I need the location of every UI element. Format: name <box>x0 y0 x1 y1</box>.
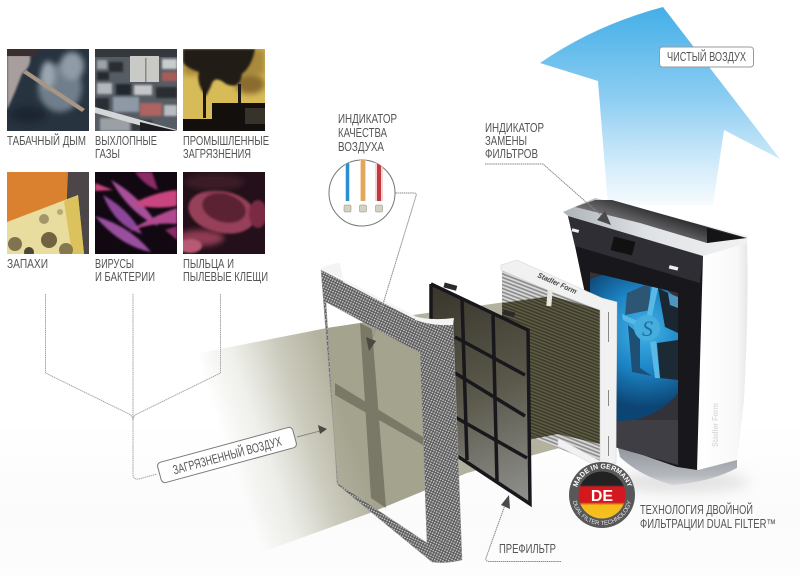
label: exhaust gases: ВЫХЛОПНЫЕ <box>95 134 157 148</box>
prefilter <box>425 283 530 505</box>
filter louvers <box>502 268 600 465</box>
label: industrial pollution: ПРОМЫШЛЕННЫЕ <box>183 134 269 148</box>
front perforated panel <box>320 263 462 563</box>
filter pleats <box>502 296 600 445</box>
heading: filter replacement indicator: ЗАМЕНЫ <box>485 134 527 148</box>
unit body <box>568 216 703 470</box>
brand text on frame: Stadler Form <box>536 271 578 296</box>
window tint over beam <box>328 322 425 510</box>
photo: odours <box>7 172 89 257</box>
panel white lip <box>320 263 343 279</box>
main filter <box>501 260 617 468</box>
unit top cap <box>563 198 748 256</box>
unit white side <box>698 241 748 470</box>
arrow: prefilter <box>486 495 561 562</box>
fan window <box>590 272 678 465</box>
label: tobacco smoke: ТАБАЧНЫЙ ДЫМ <box>7 133 86 148</box>
label: viruses and bacteria: И БАКТЕРИИ <box>95 270 155 284</box>
label: prefilter: ПРЕФИЛЬТР <box>499 542 556 556</box>
heading: air quality indicator: ВОЗДУХА <box>338 140 385 154</box>
connector lines from pollutants <box>46 294 220 479</box>
vertical logo: Stadler Form <box>711 403 720 447</box>
label: industrial pollution: ЗАГРЯЗНЕНИЯ <box>183 147 251 161</box>
label: pollen and mites: ПЫЛЬЦА И <box>183 257 234 271</box>
floor shading <box>0 420 800 576</box>
badge: made in Germany <box>569 462 635 528</box>
window cross shadow <box>335 323 423 508</box>
photo: tobacco smoke <box>7 49 89 131</box>
arrow: air quality indicator <box>366 193 416 351</box>
heading: filter replacement indicator: ФИЛЬТРОВ <box>485 147 538 161</box>
indicator module <box>611 237 635 255</box>
photo: viruses and bacteria <box>95 172 177 254</box>
label: pollen and mites: ПЫЛЕВЫЕ КЛЕЩИ <box>183 270 268 284</box>
label: dual filter technology: ТЕХНОЛОГИЯ ДВОЙНОЙ <box>640 502 753 517</box>
heading: filter replacement indicator: ИНДИКАТОР <box>485 121 544 135</box>
label: polluted air <box>157 427 297 483</box>
photo: industrial pollution <box>183 49 265 131</box>
label: exhaust gases: ГАЗЫ <box>95 147 120 161</box>
badge: made in Germany: DUAL FILTER TECHNOLOGY <box>572 500 631 525</box>
unit base <box>617 443 737 485</box>
purifier unit <box>546 198 748 485</box>
heading: air quality indicator: КАЧЕСТВА <box>338 126 388 140</box>
arrow: polluted air <box>297 425 327 437</box>
photo: pollen and dust mites <box>176 172 267 254</box>
fan logo: S <box>642 316 653 341</box>
indicator magnifier circle <box>329 160 395 226</box>
polluted air beam <box>200 288 600 560</box>
heading: air quality indicator: ИНДИКАТОР <box>338 112 397 126</box>
label: odours: ЗАПАХИ <box>7 257 48 271</box>
label: clean air: ЧИСТЫЙ ВОЗДУХ <box>667 49 746 64</box>
clean air arrow <box>540 7 780 205</box>
unit floor shadow <box>610 472 750 492</box>
badge: made in Germany: MADE IN GERMANY <box>572 464 632 487</box>
arrow: filter replacement indicator <box>485 164 611 225</box>
label: viruses and bacteria: ВИРУСЫ <box>95 257 134 271</box>
filter frame <box>501 260 617 468</box>
badge: made in Germany: DE <box>591 488 613 505</box>
label: polluted air: ЗАГРЯЗНЕННЫЙ ВОЗДУХ <box>171 434 283 477</box>
photo: traffic exhaust <box>95 49 177 131</box>
label: clean air <box>660 47 754 67</box>
